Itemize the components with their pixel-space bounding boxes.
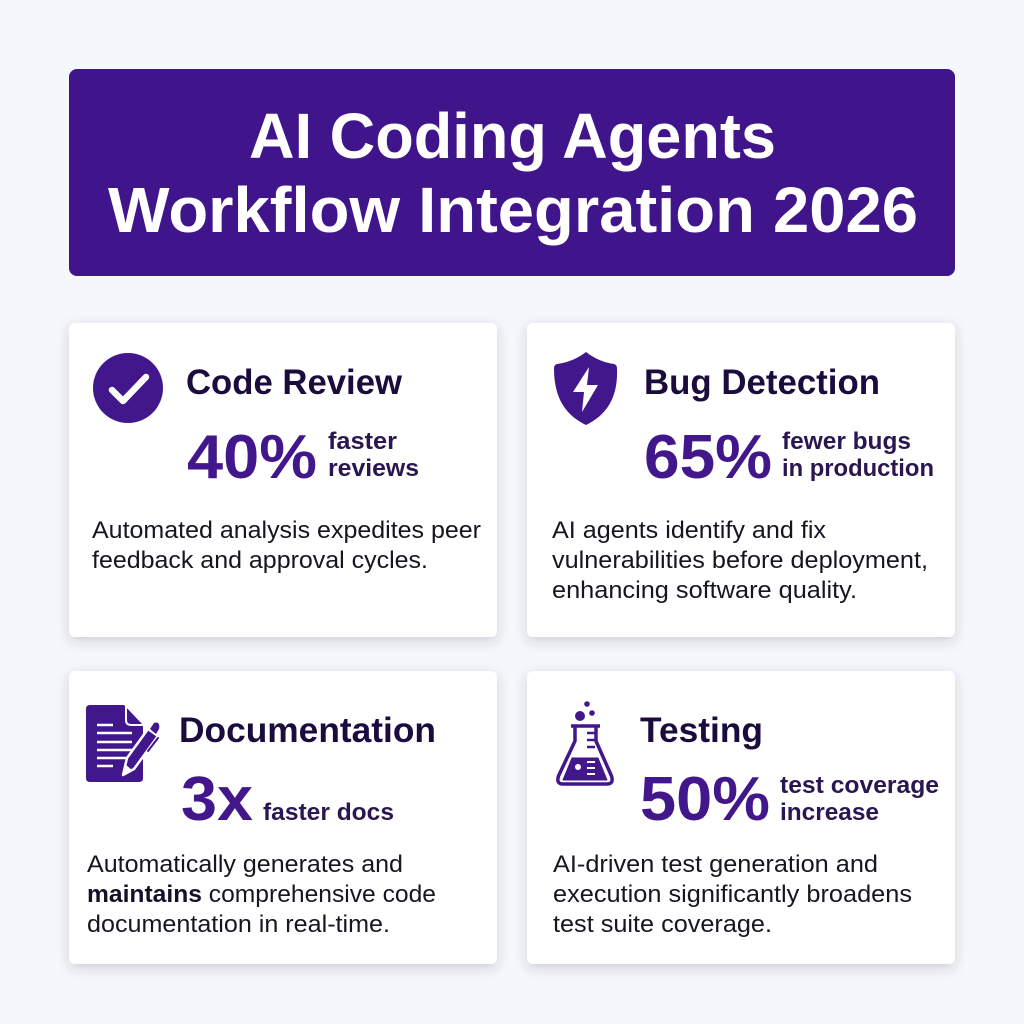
title: Workflow Integration 2026	[108, 174, 918, 246]
description: bug detection: AI agents identify and fix	[552, 517, 826, 544]
description: documentation: documentation in real-time.	[87, 911, 390, 938]
title banner	[69, 69, 955, 276]
description: testing: AI-driven test generation and	[553, 851, 878, 878]
stat: 40%: 40%	[187, 423, 317, 492]
icon: flask	[558, 701, 612, 784]
heading: bug detection: Bug Detection	[644, 363, 880, 402]
description: testing: test suite coverage.	[553, 911, 772, 938]
stat label: test coverage increase: increase	[780, 799, 879, 826]
panel: testing	[527, 671, 955, 964]
stat label: fewer bugs in production: in production	[782, 455, 934, 482]
description: documentation: maintains comprehensive code	[87, 881, 436, 908]
description: testing	[553, 851, 912, 938]
stat label: faster reviews: reviews	[328, 455, 419, 482]
icon: document and pen	[86, 705, 159, 782]
panel: code review	[69, 323, 497, 637]
description: code review: Automated analysis expedites peer	[92, 517, 481, 544]
icon: check circle	[93, 353, 163, 423]
description: bug detection: enhancing software quality.	[552, 577, 857, 604]
stat: 65%: 65%	[644, 423, 772, 492]
panel: bug detection	[527, 323, 955, 637]
stat label: faster docs: faster docs	[263, 799, 394, 826]
stat: 3x: 3x	[181, 765, 254, 834]
description: documentation: Automatically generates and	[87, 851, 403, 878]
stat label: test coverage increase: test coverage	[780, 772, 939, 799]
description: code review	[92, 517, 481, 574]
stat: 50%: 50%	[640, 765, 770, 834]
heading: documentation: Documentation	[179, 711, 436, 750]
title: AI Coding Agents	[249, 100, 776, 172]
stat label: faster reviews	[328, 428, 419, 482]
title	[108, 100, 918, 246]
heading: testing: Testing	[640, 711, 763, 750]
description: code review: feedback and approval cycles.	[92, 547, 428, 574]
stat label: test coverage increase	[780, 772, 939, 826]
description: testing: execution significantly broadens	[553, 881, 912, 908]
description: bug detection: vulnerabilities before deployment,	[552, 547, 928, 574]
stat label: fewer bugs in production: fewer bugs	[782, 428, 911, 455]
description: bug detection	[552, 517, 928, 604]
icon: shield with bolt	[554, 352, 617, 425]
stat label: faster reviews: faster	[328, 428, 397, 455]
stat label: fewer bugs in production	[782, 428, 934, 482]
heading: code review: Code Review	[186, 363, 403, 402]
description: documentation	[87, 851, 436, 938]
panel: documentation	[69, 671, 497, 964]
